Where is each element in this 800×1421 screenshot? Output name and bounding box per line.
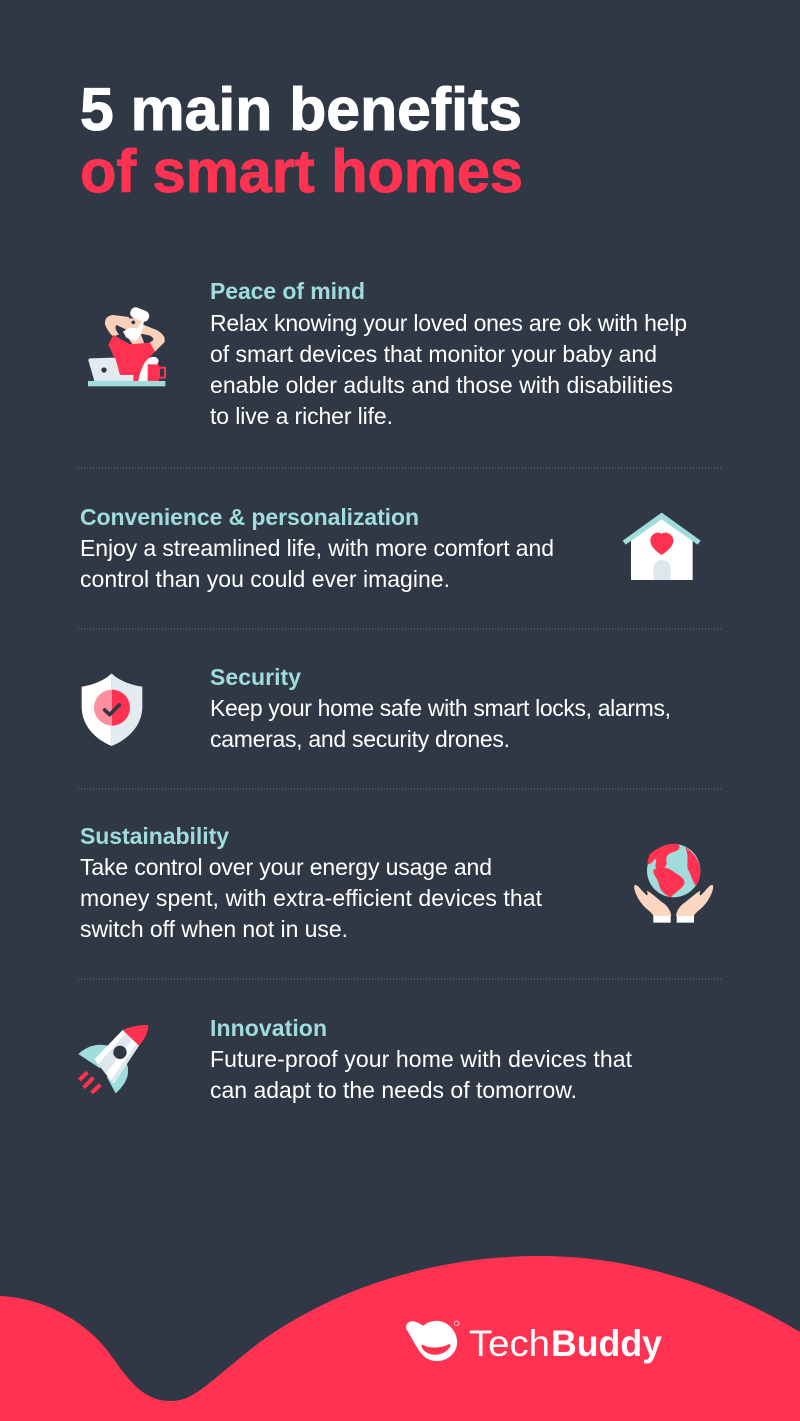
benefit 1: peace of mind bbox=[88, 278, 687, 429]
heading: Security bbox=[210, 664, 301, 690]
title: 5 main benefits bbox=[80, 76, 522, 143]
icon: rocket bbox=[78, 1025, 148, 1093]
description: money spent, with extra-efficient devices that bbox=[80, 885, 543, 911]
description bbox=[210, 310, 687, 429]
icon: house with heart bbox=[623, 513, 701, 580]
description: to live a richer life. bbox=[210, 403, 393, 429]
description: switch off when not in use. bbox=[80, 916, 348, 942]
icon: relaxed person at laptop bbox=[88, 306, 165, 386]
description: Future-proof your home with devices that bbox=[210, 1046, 633, 1072]
icon: logo smile bbox=[406, 1321, 459, 1361]
logo: TechBuddy bbox=[406, 1321, 662, 1364]
description: enable older adults and those with disabilities bbox=[210, 372, 673, 398]
footer wave bbox=[0, 1256, 800, 1421]
heading: Sustainability bbox=[80, 823, 229, 849]
description: of smart devices that monitor your baby and bbox=[210, 341, 657, 367]
description: can adapt to the needs of tomorrow. bbox=[210, 1077, 577, 1103]
description bbox=[210, 1046, 633, 1103]
icon: shield with check bbox=[82, 673, 142, 746]
title: of smart homes bbox=[80, 138, 523, 205]
description: Relax knowing your loved ones are ok with help bbox=[210, 310, 687, 336]
description bbox=[80, 535, 554, 592]
benefit 4: sustainability bbox=[80, 823, 713, 942]
description: Enjoy a streamlined life, with more comfort and bbox=[80, 535, 554, 561]
logo: TechBuddy: Buddy bbox=[551, 1323, 662, 1364]
heading: Innovation bbox=[210, 1015, 327, 1041]
description: Take control over your energy usage and bbox=[80, 854, 492, 880]
description: cameras, and security drones. bbox=[210, 726, 510, 752]
description bbox=[210, 695, 671, 752]
wordmark: Tech bbox=[469, 1323, 550, 1364]
benefit 2: convenience and personalization bbox=[80, 504, 701, 592]
heading: Convenience & personalization bbox=[80, 504, 419, 530]
description bbox=[80, 854, 543, 942]
benefit 3: security bbox=[82, 664, 671, 752]
icon: globe in hands bbox=[634, 844, 713, 923]
description: control than you could ever imagine. bbox=[80, 566, 450, 592]
title bbox=[80, 76, 523, 205]
description: Keep your home safe with smart locks, alarms, bbox=[210, 695, 671, 721]
benefit 5: innovation bbox=[78, 1015, 633, 1103]
heading: Peace of mind bbox=[210, 278, 365, 304]
